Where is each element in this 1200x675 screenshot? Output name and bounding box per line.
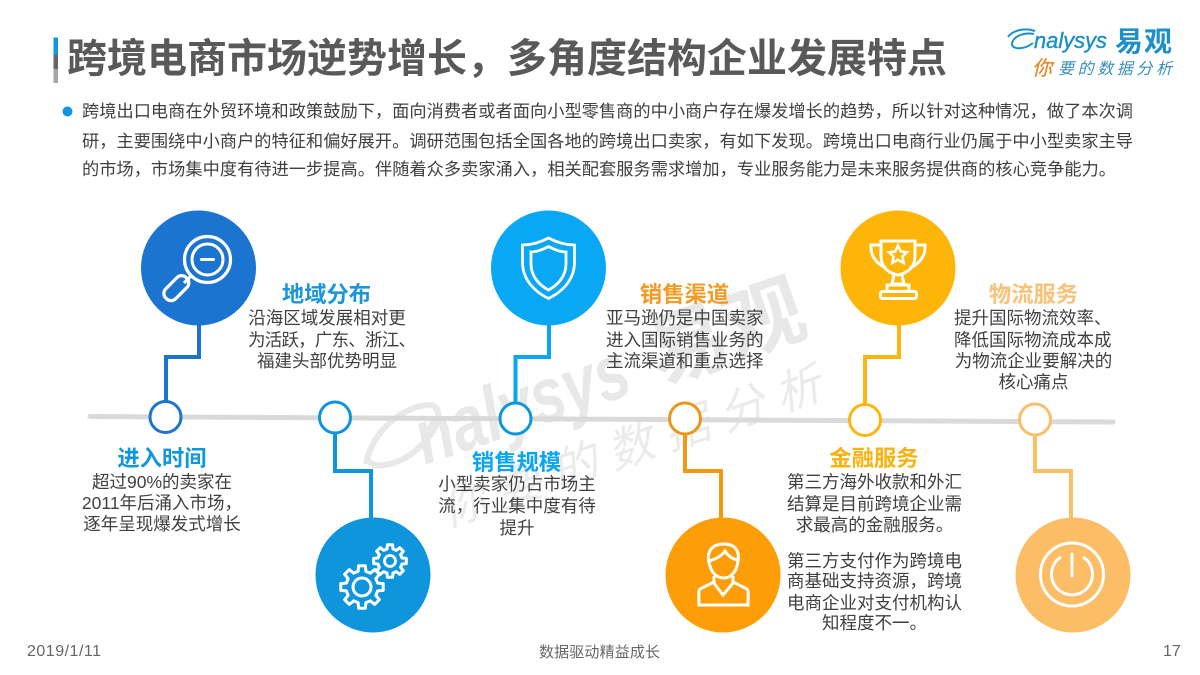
text block: 进入时间: 2011年后涌入市场， xyxy=(82,493,242,513)
intro paragraph: 的市场，市场集中度有待进一步提高。伴随着众多卖家涌入，相关配套服务需求增加，专业服务能力是未来服务提供商的核心竞争能力。 xyxy=(82,159,1116,179)
watermark xyxy=(366,264,836,537)
node 4 xyxy=(670,403,700,434)
text block: 销售规模: 提升 xyxy=(500,518,534,538)
logo: 易观 xyxy=(1115,26,1172,57)
text block: 销售渠道: 销售渠道 xyxy=(640,282,729,307)
text block: 进入时间: 超过90%的卖家在 xyxy=(92,472,232,492)
text block: 地域分布 xyxy=(248,282,416,371)
icon circle: shield xyxy=(491,210,606,326)
icon circle: person xyxy=(666,518,780,632)
intro paragraph xyxy=(62,101,1133,179)
text block: 进入时间: 进入时间 xyxy=(117,446,207,471)
text block: 金融服务: 求最高的金融服务。 xyxy=(796,515,953,535)
text block: 金融服务: 结算是目前跨境企业需 xyxy=(787,494,962,514)
text block: 物流服务: 物流服务 xyxy=(989,282,1078,307)
connector 6 xyxy=(1035,434,1071,522)
text block: 物流服务 xyxy=(954,282,1112,392)
text block: 销售规模: 小型卖家仍占市场主 xyxy=(438,474,596,494)
text block: 物流服务: 提升国际物流效率、 xyxy=(954,308,1112,328)
bullet xyxy=(62,106,72,116)
text block: 地域分布: 为活跃，广东、浙江、 xyxy=(248,330,416,350)
logo: 要的数据分析 xyxy=(1058,60,1174,78)
text block: 金融服务: 知程度不一。 xyxy=(822,613,927,633)
connector 4 xyxy=(685,432,721,522)
text block: 销售渠道 xyxy=(606,282,764,371)
node 6 xyxy=(1020,404,1050,435)
icon circle: gears xyxy=(316,518,430,632)
logo: 你 xyxy=(1032,58,1055,80)
node 5 xyxy=(850,404,880,436)
text block: 地域分布: 沿海区域发展相对更 xyxy=(248,308,406,328)
node 1 xyxy=(150,402,181,432)
text block: 金融服务: 电商企业对支付机构认 xyxy=(787,593,962,613)
text block: 金融服务: 金融服务 xyxy=(829,445,919,471)
icon circle: magnifier xyxy=(141,210,256,326)
intro paragraph: 跨境出口电商在外贸环境和政策鼓励下，面向消费者或者面向小型零售商的中小商户存在爆发增长的趋势，所以针对这种情况，做了本次调 xyxy=(82,101,1133,121)
logo xyxy=(1008,26,1174,80)
text block: 物流服务: 核心痛点 xyxy=(998,372,1068,392)
title: 跨境电商市场逆势增长，多角度结构企业发展特点 xyxy=(67,37,947,81)
text block: 进入时间: 逐年呈现爆发式增长 xyxy=(83,514,241,534)
text block: 进入时间 xyxy=(82,446,242,534)
title accent bar xyxy=(54,38,58,83)
text block: 销售渠道: 亚马逊仍是中国卖家 xyxy=(606,308,764,328)
footer date: 2019/1/11 xyxy=(27,643,101,660)
text block: 金融服务 xyxy=(787,445,962,633)
node 3 xyxy=(500,403,531,434)
text block: 销售渠道: 主流渠道和重点选择 xyxy=(606,351,764,371)
text block: 地域分布: 地域分布 xyxy=(282,282,371,307)
timeline axis xyxy=(90,416,1113,422)
footer slogan: 数据驱动精益成长 xyxy=(539,644,660,661)
node 2 xyxy=(320,402,350,433)
connector 1 xyxy=(166,322,199,403)
text block: 地域分布: 福建头部优势明显 xyxy=(257,351,397,371)
watermark: 你要的数据分析 xyxy=(433,356,833,537)
text block: 金融服务: 第三方海外收款和外汇 xyxy=(787,472,962,492)
intro paragraph: 研，主要围绕中小商户的特征和偏好展开。调研范围包括全国各地的跨境出口卖家，有如下发现。跨境出口电商行业仍属于中小型卖家主导 xyxy=(82,131,1133,151)
text block: 物流服务: 为物流企业要解决的 xyxy=(955,351,1112,371)
icon circle: trophy xyxy=(840,210,956,326)
icon circle: power xyxy=(1016,518,1130,632)
text block: 销售规模 xyxy=(438,450,596,538)
text block: 销售渠道: 进入国际销售业务的 xyxy=(606,330,764,350)
logo: nalysys xyxy=(1034,28,1107,53)
text block: 销售规模: 流，行业集中度有待 xyxy=(438,496,596,516)
connector 5 xyxy=(865,322,899,405)
connector 2 xyxy=(335,432,371,522)
page number: 17 xyxy=(1163,643,1181,660)
text block: 金融服务: 第三方支付作为跨境电 xyxy=(787,551,962,571)
text block: 销售规模: 销售规模 xyxy=(472,450,561,475)
watermark: 易观 xyxy=(636,264,816,400)
watermark: nalysys xyxy=(402,326,640,481)
text block: 金融服务: 商基础支持资源，跨境 xyxy=(787,571,962,591)
text block: 物流服务: 降低国际物流成本成 xyxy=(954,330,1112,350)
connector 3 xyxy=(516,322,549,403)
